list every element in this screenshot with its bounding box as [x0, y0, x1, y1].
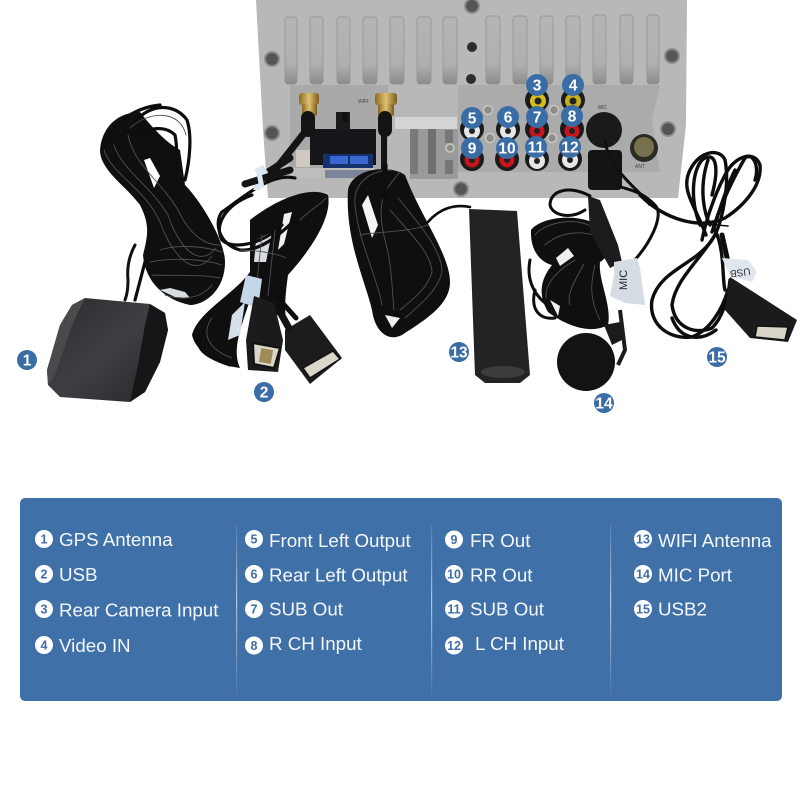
- cooling fins: [285, 15, 659, 84]
- legend column 3: SUB Out: [470, 598, 545, 620]
- GPS antenna puck: [47, 298, 168, 402]
- coil: USB cables: [192, 177, 329, 368]
- callout badges on photo: 8: [568, 108, 577, 126]
- legend column 2: [245, 530, 412, 654]
- coil: WIFI antenna cable: [348, 165, 470, 337]
- coil: USB2 cable: [640, 153, 760, 337]
- legend column 1: USB: [59, 564, 98, 585]
- chassis labels: ANT: [635, 164, 645, 170]
- chassis labels: [358, 99, 645, 170]
- legend column 1: GPS Antenna: [59, 529, 173, 550]
- legend column 3: [445, 530, 565, 654]
- legend column 1: Video IN: [59, 635, 131, 656]
- legend column 3: 10: [447, 568, 461, 582]
- coil: GPS antenna cable: [100, 105, 225, 305]
- callout badges on photo: 2: [260, 384, 268, 402]
- legend column 2: SUB Out: [269, 598, 344, 620]
- legend column 1: 3: [41, 602, 48, 616]
- chassis labels: WIFI: [358, 99, 369, 105]
- legend column 2: 8: [251, 639, 258, 653]
- RCA sockets: [460, 88, 585, 171]
- cable tie: [245, 165, 290, 190]
- legend column 2: 5: [251, 532, 258, 546]
- callout badges on photo: 4: [569, 78, 578, 94]
- WIFI antenna: [469, 209, 530, 383]
- callout badges on photo: 11: [528, 140, 545, 156]
- callout badges on photo: 12: [561, 140, 579, 156]
- callout badges on photo: 6: [504, 110, 513, 126]
- legend column 1: 4: [41, 638, 48, 652]
- legend column 2: Rear Left Output: [269, 564, 408, 586]
- bolts and screw holes: [265, 0, 679, 196]
- callout badges on photo: 15: [708, 350, 726, 366]
- callout badges on photo: 5: [468, 110, 477, 128]
- callout badges on photo: 13: [450, 344, 468, 362]
- legend column 4: 15: [636, 602, 650, 616]
- legend column 4: MIC Port: [658, 564, 733, 586]
- USB2 label: USB: [729, 265, 751, 279]
- legend column 1: 1: [41, 532, 48, 546]
- microphone with cable: [529, 186, 658, 391]
- callout badges on photo: 7: [533, 110, 541, 126]
- legend column 1: [35, 529, 219, 656]
- ANT socket: [630, 134, 658, 162]
- legend column 2: R CH Input: [269, 633, 363, 654]
- legend column 4: WIFI Antenna: [658, 530, 772, 551]
- USB connector A: [246, 296, 283, 372]
- legend column 1: 2: [41, 568, 48, 582]
- legend column 3: L CH Input: [475, 633, 565, 654]
- USB2 connector: [725, 277, 797, 342]
- callout badges on photo: [17, 74, 727, 413]
- USB connector B: [280, 312, 342, 384]
- panel: legend: [20, 498, 782, 701]
- legend column 4: 13: [636, 532, 650, 546]
- callout badges on photo: 1: [23, 352, 32, 370]
- legend column 4: [634, 530, 772, 620]
- wiring harness connector: [290, 112, 376, 178]
- panel: radio rear chassis: [256, 0, 687, 205]
- callout badges on photo: 3: [533, 78, 542, 94]
- legend column 3: 9: [451, 533, 458, 547]
- callout badges on photo: 9: [468, 140, 477, 158]
- legend column 4: 14: [636, 568, 650, 582]
- legend column 1: Rear Camera Input: [59, 600, 219, 620]
- legend column 2: Front Left Output: [269, 530, 412, 551]
- MIC plug: [586, 112, 650, 205]
- legend column 2: 7: [251, 602, 258, 616]
- MIC label: [610, 258, 645, 305]
- legend column 4: USB2: [658, 598, 707, 620]
- gold SMA connectors: [299, 93, 397, 116]
- callout badges on photo: 14: [595, 396, 613, 412]
- legend column 3: RR Out: [470, 564, 533, 586]
- USB2 label: [722, 258, 757, 282]
- legend column 3: FR Out: [470, 530, 531, 551]
- legend column 3: 11: [447, 602, 461, 616]
- USB labels: [240, 275, 262, 308]
- callout badges on photo: 10: [498, 140, 516, 158]
- antenna boots: [262, 118, 385, 176]
- MIC label: MIC: [618, 270, 630, 290]
- legend column 2: 6: [251, 568, 258, 582]
- chassis labels: MIC: [598, 105, 608, 111]
- legend column 3: 12: [447, 639, 461, 653]
